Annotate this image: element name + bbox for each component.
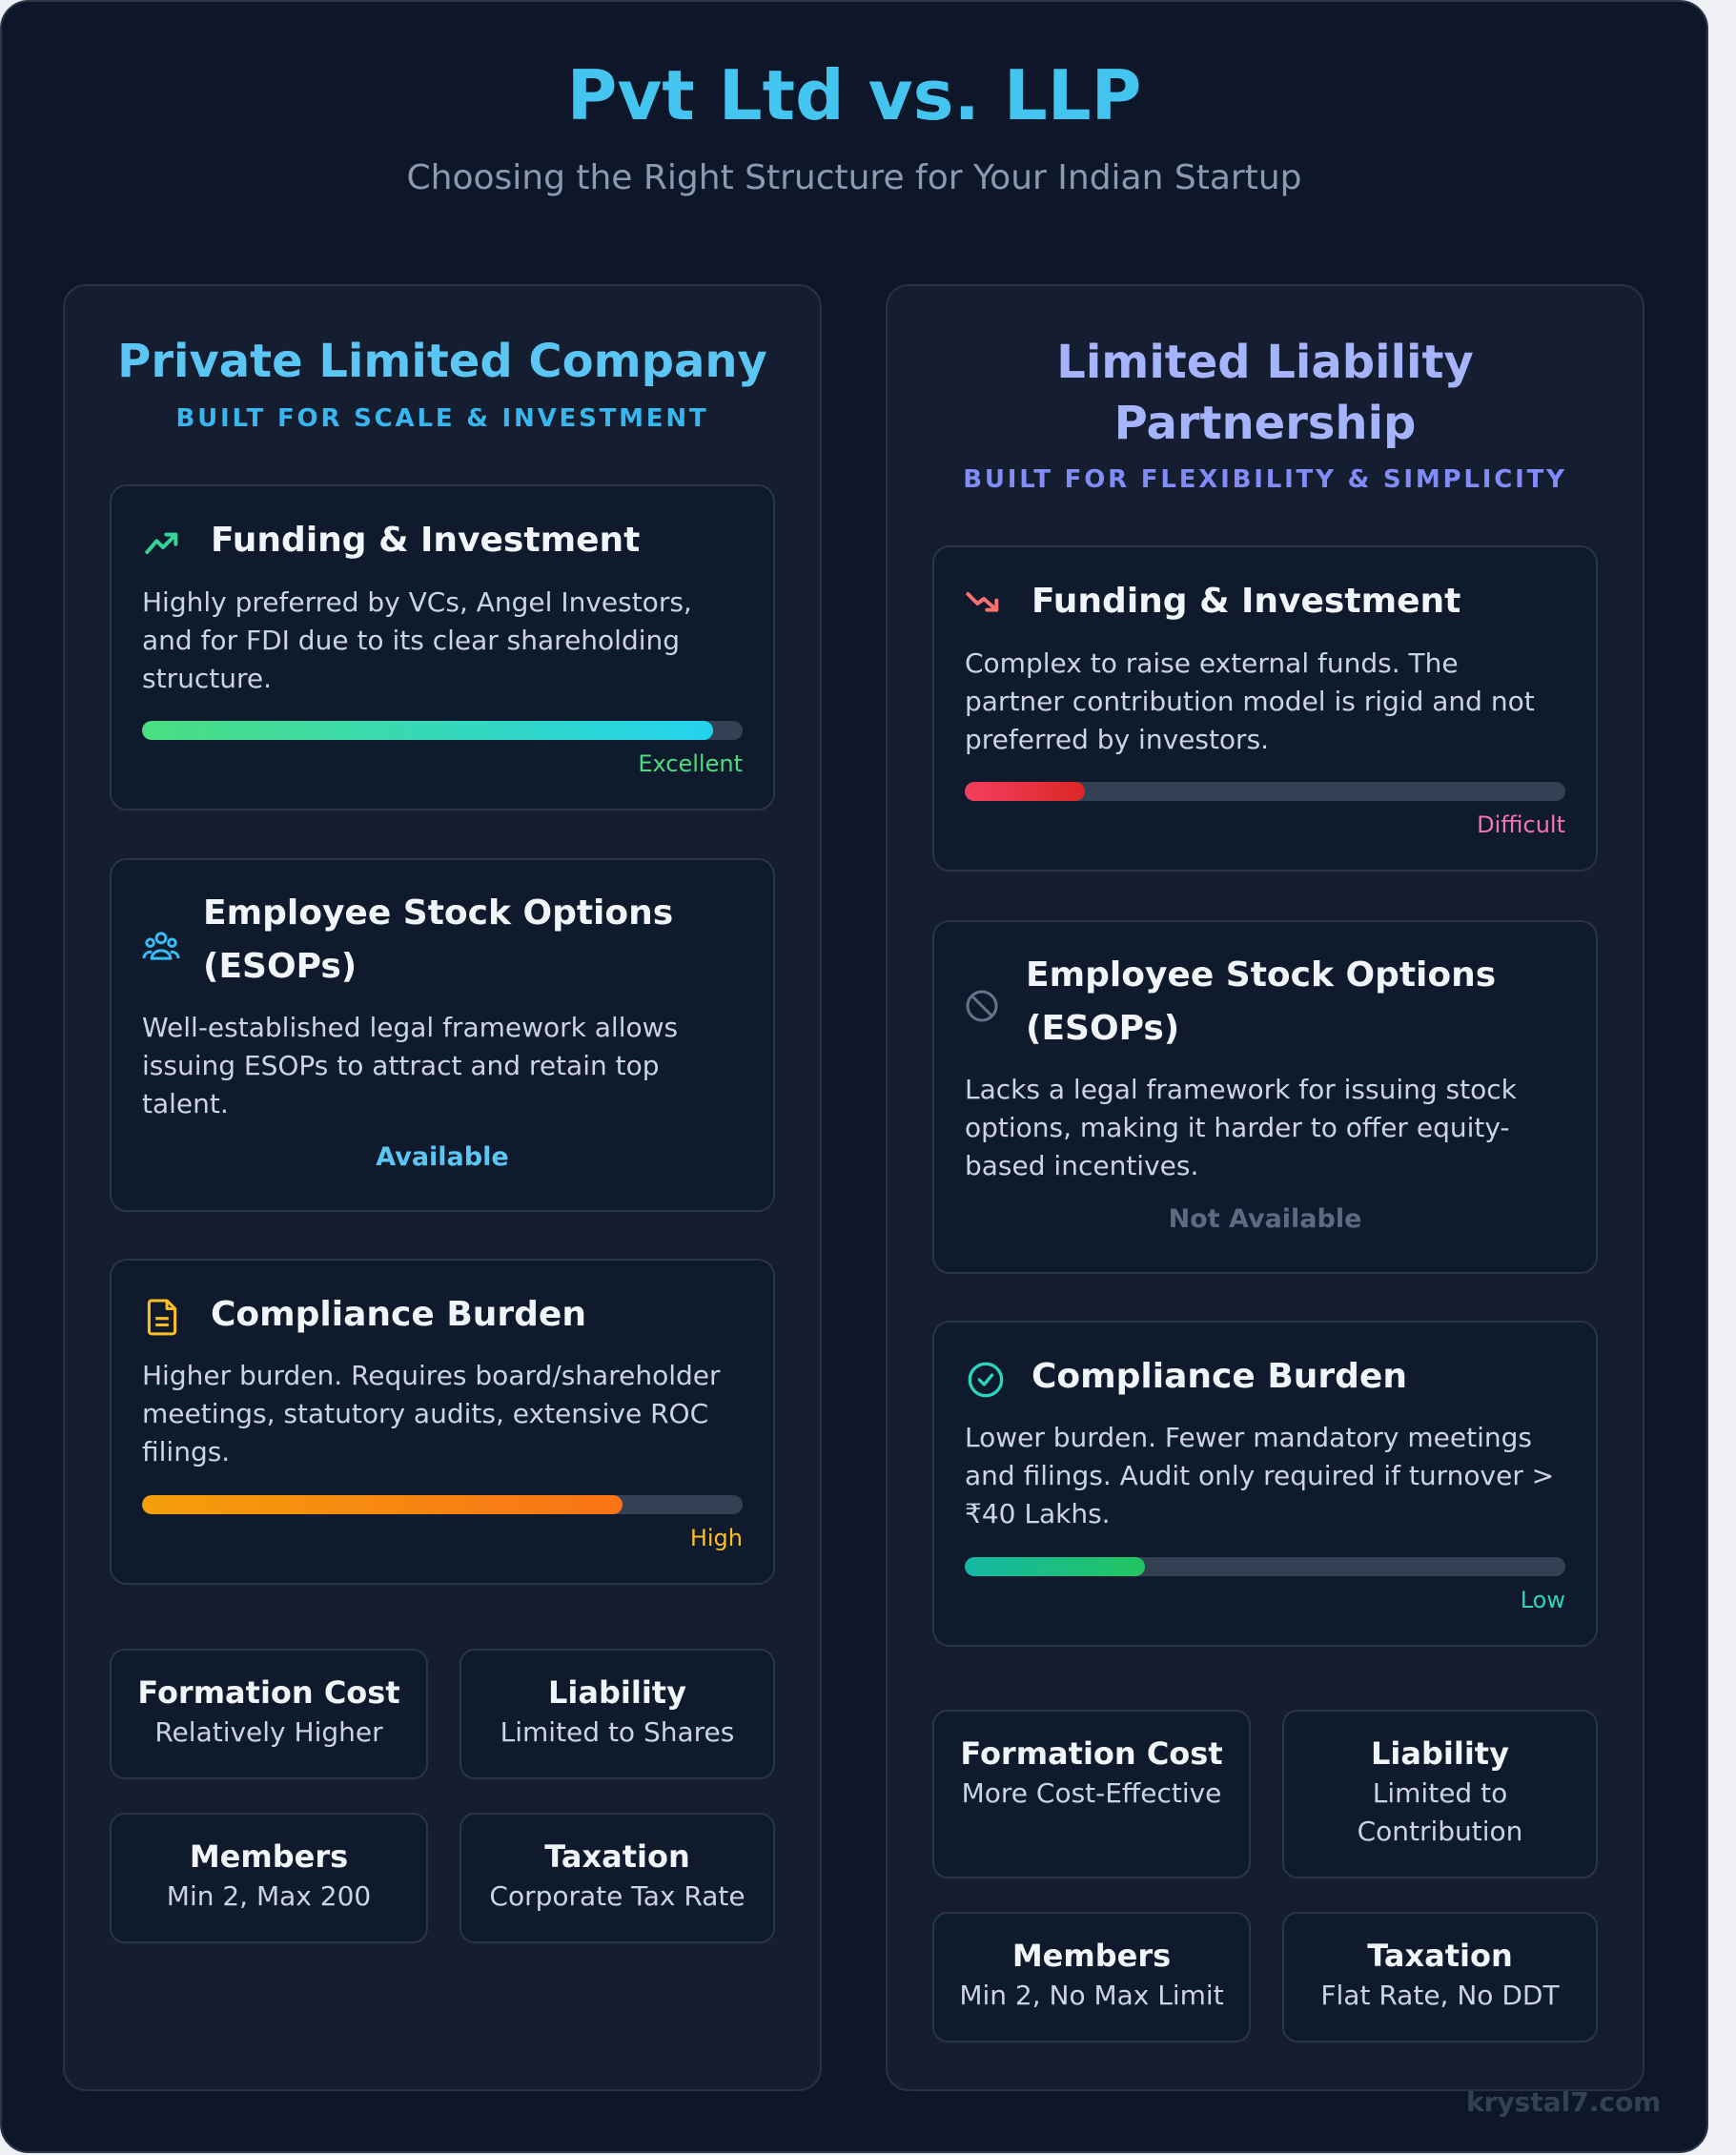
card: funding	[110, 484, 775, 811]
label: Low	[1521, 1587, 1565, 1613]
small card: formation cost: Formation Cost	[137, 1674, 400, 1711]
card title: Compliance Burden	[211, 1295, 586, 1334]
small card: formation cost: More Cost-Effective	[962, 1777, 1221, 1809]
status: Available	[376, 1142, 509, 1172]
card body	[142, 1012, 678, 1119]
card body: structure.	[142, 663, 272, 694]
small card: formation cost	[110, 1649, 428, 1779]
panel subheading: BUILT FOR FLEXIBILITY & SIMPLICITY	[963, 465, 1567, 494]
panel: limited liability partnership	[886, 284, 1644, 2091]
card body: options, making it harder to offer equity-	[965, 1112, 1510, 1143]
small card: members: Members	[190, 1838, 348, 1875]
icon: prohibited	[967, 990, 997, 1022]
card title: Employee Stock Options	[1026, 955, 1496, 995]
card body: Lacks a legal framework for issuing stock	[965, 1074, 1517, 1105]
bar: high	[142, 1495, 743, 1514]
small card: taxation: Flat Rate, No DDT	[1320, 1980, 1560, 2011]
card title	[203, 893, 673, 986]
panel subheading: BUILT FOR SCALE & INVESTMENT	[176, 404, 708, 433]
card body: Well-established legal framework allows	[142, 1012, 678, 1043]
small card: members	[932, 1912, 1251, 2042]
card body	[965, 1074, 1517, 1181]
card body: meetings, statutory audits, extensive ROC	[142, 1398, 708, 1429]
card body: talent.	[142, 1088, 229, 1119]
card body: and filings. Audit only required if turnover >	[965, 1460, 1554, 1491]
small card: members: Min 2, No Max Limit	[959, 1980, 1224, 2011]
card title: (ESOPs)	[203, 947, 357, 986]
small card: formation cost	[932, 1710, 1251, 1878]
icon: trending down	[966, 591, 999, 612]
card body: partner contribution model is rigid and not	[965, 686, 1535, 717]
bar: low	[965, 1557, 1565, 1576]
small card: liability: Contribution	[1358, 1816, 1522, 1847]
label: Excellent	[638, 750, 743, 777]
small card: members	[110, 1813, 428, 1943]
card body: issuing ESOPs to attract and retain top	[142, 1050, 660, 1081]
panel heading	[1056, 336, 1474, 450]
card: esops	[932, 920, 1598, 1274]
card body: based incentives.	[965, 1150, 1198, 1181]
small card: liability: Liability	[548, 1674, 686, 1711]
card body	[965, 647, 1535, 755]
panel: private limited company	[63, 284, 822, 2091]
card title: Funding & Investment	[1031, 582, 1460, 621]
card body: Lower burden. Fewer mandatory meetings	[965, 1422, 1532, 1453]
small card: liability	[460, 1649, 775, 1779]
card body	[142, 586, 692, 694]
small card: formation cost: Formation Cost	[960, 1735, 1223, 1772]
card title: Compliance Burden	[1031, 1357, 1407, 1396]
title: Pvt Ltd vs. LLP	[567, 55, 1141, 135]
watermark: krystal7.com	[1466, 2086, 1661, 2118]
status: Not Available	[1169, 1204, 1361, 1234]
label: Difficult	[1477, 811, 1565, 838]
card: compliance	[110, 1259, 775, 1585]
small card: liability: Limited to	[1373, 1777, 1507, 1809]
subtitle: Choosing the Right Structure for Your Indian Startup	[406, 158, 1302, 197]
small card: liability: Limited to Shares	[500, 1716, 734, 1748]
label: High	[690, 1525, 743, 1551]
card body: filings.	[142, 1436, 230, 1467]
panel heading: Private Limited Company	[117, 335, 767, 388]
card body: Complex to raise external funds. The	[965, 647, 1459, 679]
panel heading: Partnership	[1114, 397, 1416, 450]
bar: difficult	[965, 782, 1565, 801]
small card: formation cost: Relatively Higher	[154, 1716, 383, 1748]
small card: taxation: Taxation	[1367, 1938, 1513, 1974]
small card: members: Min 2, Max 200	[167, 1880, 371, 1912]
card body: ₹40 Lakhs.	[965, 1498, 1111, 1529]
panel heading: Limited Liability	[1056, 336, 1474, 389]
small card: members: Members	[1012, 1938, 1171, 1974]
icon: check circle	[969, 1362, 1003, 1398]
card title: Funding & Investment	[211, 521, 640, 560]
card body: Higher burden. Requires board/shareholder	[142, 1360, 720, 1391]
card: compliance	[932, 1321, 1598, 1647]
card body: and for FDI due to its clear shareholding	[142, 625, 680, 656]
small card: taxation	[460, 1813, 775, 1943]
icon: users	[143, 932, 179, 960]
icon: trending up	[145, 532, 177, 555]
card body	[965, 1422, 1554, 1529]
card title: Employee Stock Options	[203, 893, 673, 933]
card body: Highly preferred by VCs, Angel Investors,	[142, 586, 692, 618]
small card: taxation: Corporate Tax Rate	[489, 1880, 745, 1912]
small card: liability: Liability	[1371, 1735, 1509, 1772]
card title	[1026, 955, 1496, 1048]
card: esops	[110, 858, 775, 1212]
card title: (ESOPs)	[1026, 1009, 1179, 1048]
small card: liability	[1282, 1710, 1598, 1878]
card body: preferred by investors.	[965, 724, 1269, 755]
icon: document	[147, 1299, 177, 1335]
small card: taxation	[1282, 1912, 1598, 2042]
card: funding	[932, 545, 1598, 872]
bar: excellent	[142, 721, 743, 740]
card body	[142, 1360, 721, 1467]
small card: taxation: Taxation	[544, 1838, 690, 1875]
